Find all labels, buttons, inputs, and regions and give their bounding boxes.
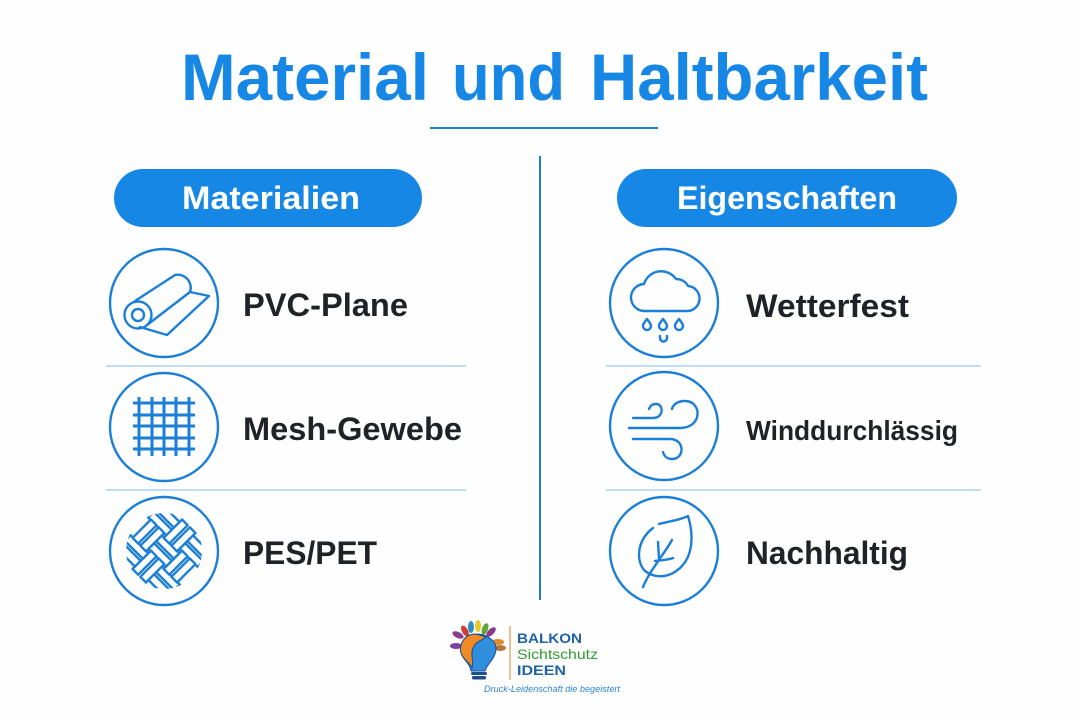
icon: woven fabric — [110, 497, 218, 605]
icon: material roll — [110, 249, 218, 357]
label: PVC-Plane: PVC-Plane — [243, 287, 408, 323]
title: Haltbarkeit — [590, 40, 928, 114]
icon: rain cloud — [610, 249, 718, 357]
title: Material — [181, 40, 429, 114]
label: Winddurchlässig: Winddurchlässig — [746, 415, 958, 446]
heading: Eigenschaften: Eigenschaften — [677, 180, 897, 216]
tagline: Druck-Leidenschaft die begeistert — [484, 684, 621, 694]
logo text: Sichtschutz — [517, 646, 598, 662]
logo text — [517, 630, 598, 678]
logo text: BALKON — [517, 630, 582, 646]
icon: leaf — [610, 497, 718, 605]
panel: Materialien — [110, 169, 462, 605]
heading: Eigenschaften — [617, 169, 957, 227]
heading: Materialien — [114, 169, 422, 227]
title: und — [452, 40, 565, 114]
title — [181, 40, 928, 114]
label: Mesh-Gewebe: Mesh-Gewebe — [243, 411, 462, 447]
panel: Eigenschaften — [610, 169, 958, 605]
label: Nachhaltig: Nachhaltig — [746, 535, 908, 571]
logo text: IDEEN — [517, 662, 566, 678]
icon: wind — [610, 372, 718, 480]
label: Wetterfest: Wetterfest — [746, 288, 909, 324]
logo: Balkon Sichtschutz Ideen — [450, 620, 621, 694]
label: PES/PET: PES/PET — [243, 535, 377, 571]
heading: Materialien: Materialien — [182, 180, 360, 216]
icon: colourful light bulb — [450, 620, 506, 680]
icon: mesh grid — [110, 373, 218, 481]
